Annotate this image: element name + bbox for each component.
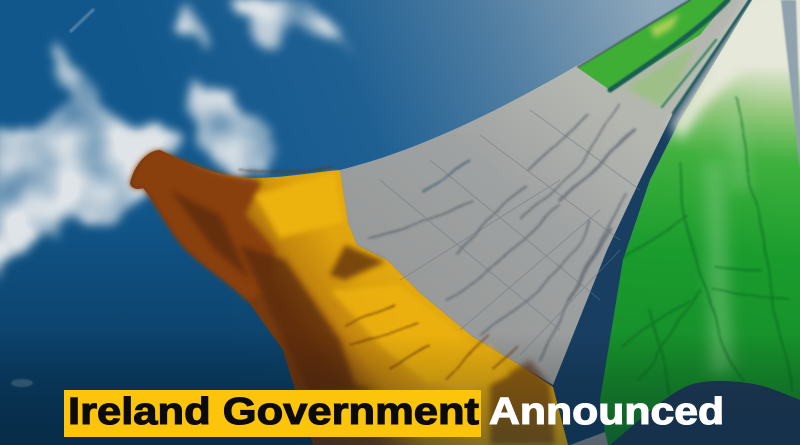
flag: green stripe [600,0,800,445]
flag: faded green band [625,43,697,107]
title word: Announced: Announced [489,391,724,433]
clouds [0,0,352,387]
sky below green stripe [610,381,800,445]
title banner [64,390,724,437]
flag: orange yellow panels [255,172,510,395]
flag: lighter green streaks [705,90,750,375]
flag: green fold creases [620,95,790,395]
flag: orange stripe [130,150,568,445]
flag: dark shadow band [553,0,752,445]
flag pole [781,0,800,170]
flag: white grid seams [380,110,640,355]
flag: bright corner of green panel [650,13,680,38]
flag: top green panel [578,0,728,90]
flag: white stripe [340,0,748,385]
flag: orange dark folds [170,190,555,445]
flag: sunlit washed-out centre [672,0,800,140]
flag: white fold creases [367,105,635,360]
flag: orange fold lines [240,168,520,380]
flag: top dark folds [578,0,750,113]
title highlight: Ireland Government: Ireland Government [68,391,479,433]
flag: lower white corner [570,432,608,445]
flag: orange dark tip [130,150,275,300]
